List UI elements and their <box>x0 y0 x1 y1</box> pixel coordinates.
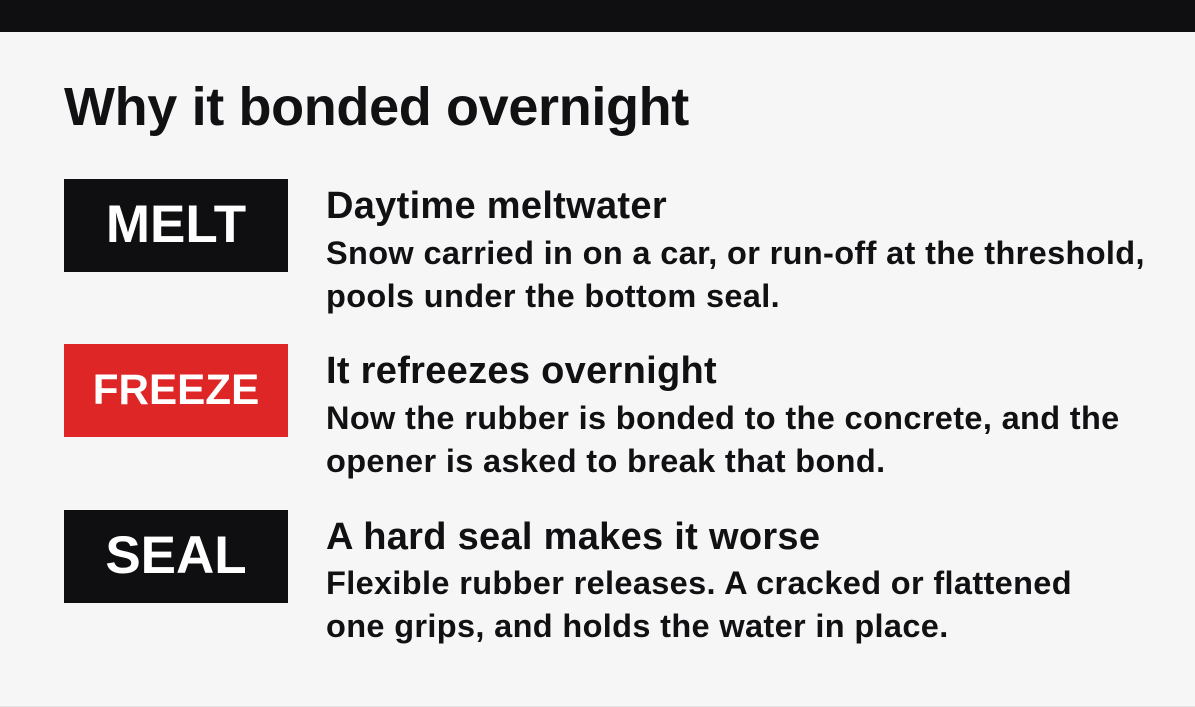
text: daytime meltwater: pools under the bottom seal. <box>326 278 780 314</box>
heading: it refreezes overnight: It refreezes overnight <box>326 350 717 392</box>
title: Why it bonded overnight <box>64 77 689 137</box>
badge: seal: SEAL <box>105 526 247 585</box>
text: it refreezes overnight: opener is asked to break that bond. <box>326 443 885 479</box>
top bar <box>0 0 1195 32</box>
text: a hard seal makes it worse <box>326 565 1072 644</box>
heading: a hard seal makes it worse: A hard seal makes it worse <box>326 516 820 558</box>
text: daytime meltwater: Snow carried in on a car, or run-off at the threshold, <box>326 235 1145 271</box>
badge: freeze: FREEZE <box>93 366 259 412</box>
heading: daytime meltwater: Daytime meltwater <box>326 185 667 227</box>
text: it refreezes overnight <box>326 400 1120 479</box>
badge: freeze <box>64 344 288 437</box>
text: a hard seal makes it worse: one grips, and holds the water in place. <box>326 608 949 644</box>
text: daytime meltwater <box>326 235 1145 314</box>
badge: melt <box>64 179 288 272</box>
badge: melt: MELT <box>106 195 246 254</box>
badge: seal <box>64 510 288 603</box>
text: a hard seal makes it worse: Flexible rubber releases. A cracked or flattened <box>326 565 1072 601</box>
text: it refreezes overnight: Now the rubber is bonded to the concrete, and the <box>326 400 1120 436</box>
